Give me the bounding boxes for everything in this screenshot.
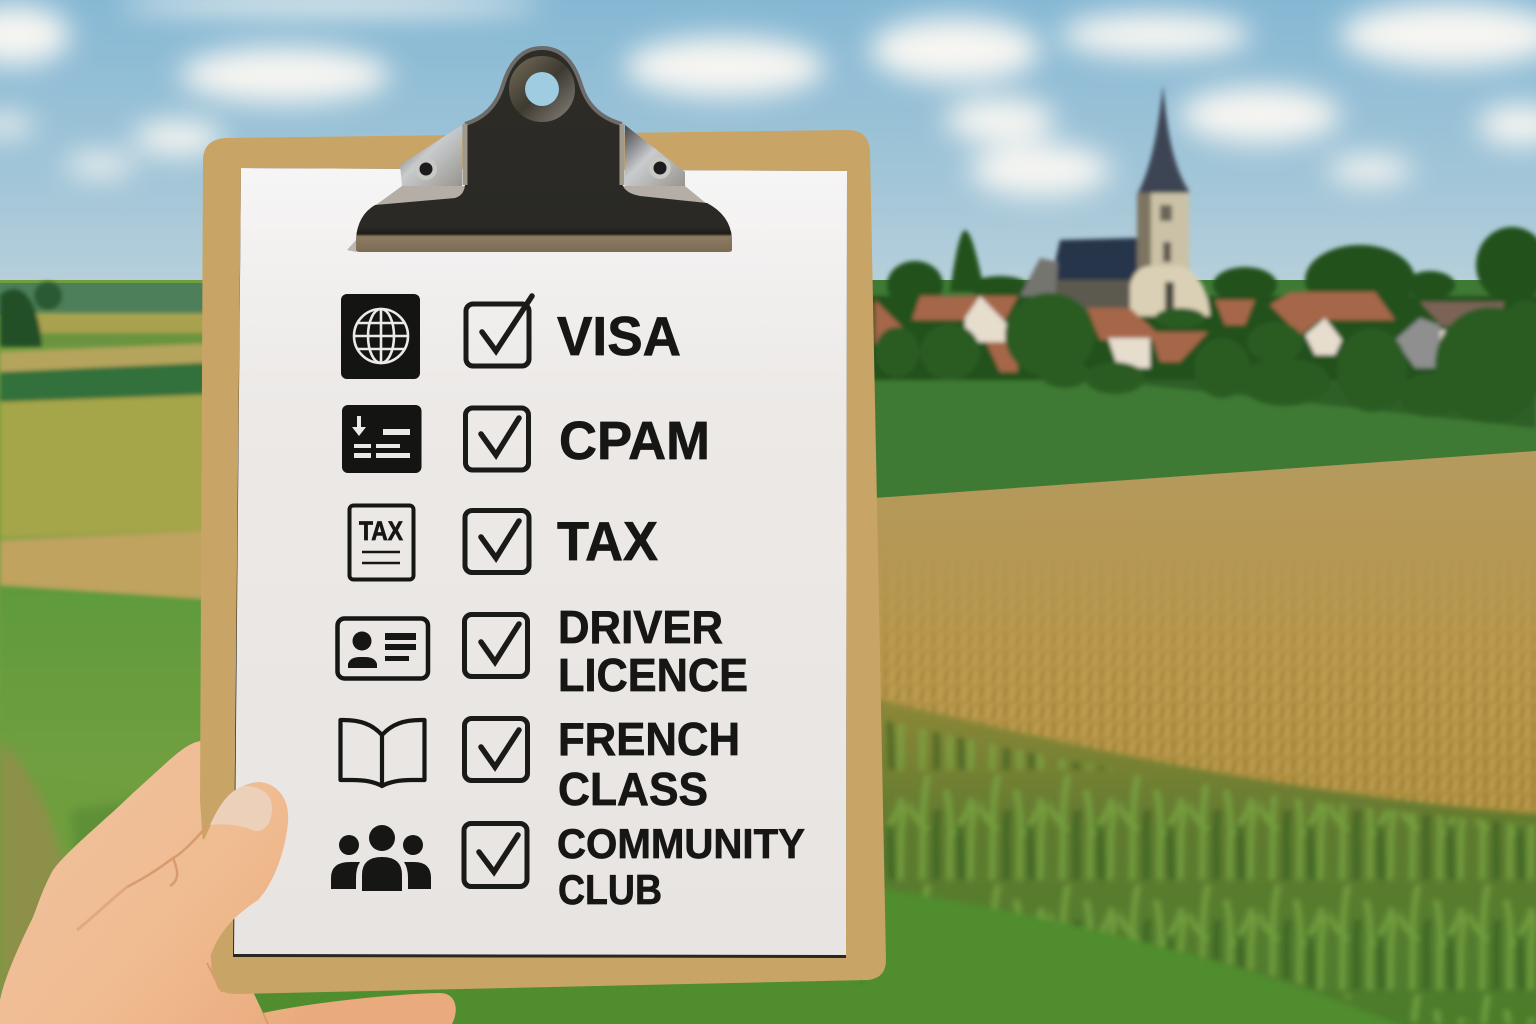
thumbnail (210, 786, 272, 831)
foreground trees (875, 293, 1536, 423)
label: cpam: CPAM (559, 411, 710, 471)
label: driver licence (558, 601, 748, 701)
label: tax: TAX (557, 510, 658, 572)
left rivet (415, 158, 437, 180)
hand: thumb in front of the clipboard (77, 782, 288, 1024)
clipboard: board and paper (200, 130, 886, 994)
tree line (860, 227, 1536, 428)
label: visa: VISA (557, 305, 681, 367)
icon: globe tile (341, 294, 420, 379)
icon: tax document (350, 506, 414, 580)
label: french class: FRENCH (558, 713, 740, 765)
background: village with church (860, 85, 1536, 428)
label: french class: CLASS (558, 763, 708, 815)
checkbox: community club (464, 824, 527, 886)
church (1020, 85, 1210, 316)
background: sky with clouds (0, 0, 1536, 340)
label: community club: COMMUNITY (557, 820, 805, 867)
hand: palm and fingers behind the clipboard (0, 741, 456, 1024)
label: community club (557, 820, 805, 913)
checklist row: community club (331, 820, 805, 913)
checklist row: driver licence (338, 601, 748, 701)
icon: open book (340, 720, 424, 786)
icon: form tile (342, 405, 422, 473)
checkbox: driver licence (464, 614, 528, 676)
icon: id card (338, 618, 428, 678)
background: left fields (0, 280, 220, 1024)
checklist row: cpam (342, 405, 710, 473)
houses (875, 292, 1395, 372)
background: right fields (250, 280, 1536, 1024)
icon: tax document: TAX (359, 516, 403, 546)
label: french class (558, 713, 740, 815)
checkbox: cpam (466, 408, 528, 470)
label: community club: CLUB (558, 866, 662, 913)
checklist row: french class (340, 713, 740, 815)
checklist row: visa (341, 294, 681, 379)
clip ring hole (525, 72, 559, 106)
checklist row: tax (350, 506, 658, 580)
label: driver licence: LICENCE (558, 649, 748, 701)
right rivet (649, 157, 671, 179)
checkbox: visa (466, 296, 532, 366)
checkbox: tax (465, 510, 529, 572)
label: driver licence: DRIVER (558, 601, 723, 653)
icon: three people (331, 825, 431, 891)
checkbox: french class (464, 718, 528, 780)
metal clip (347, 48, 732, 252)
